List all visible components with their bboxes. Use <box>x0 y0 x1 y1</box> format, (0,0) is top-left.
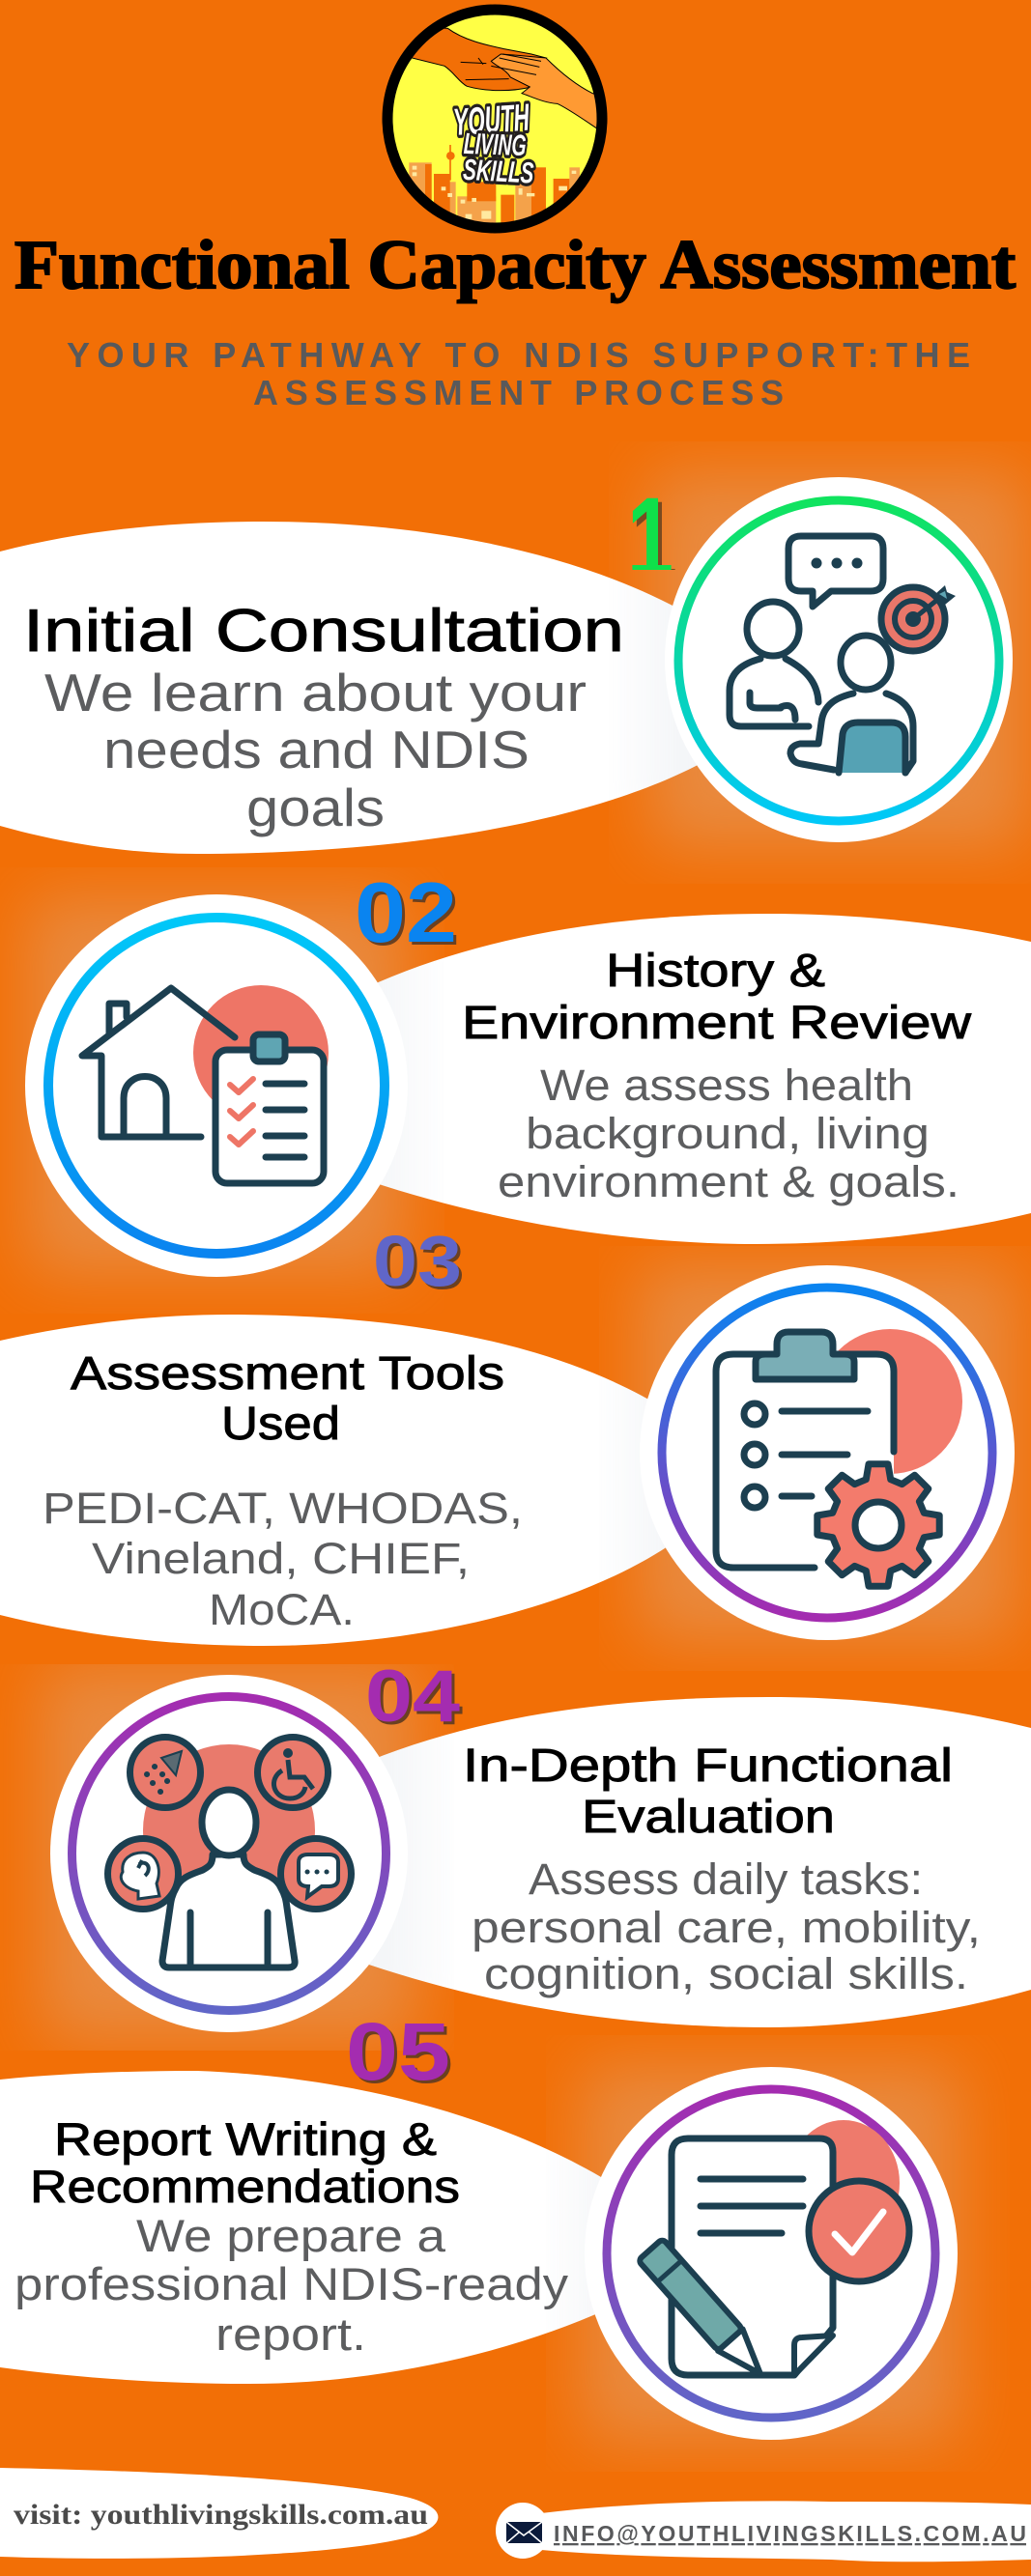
description: environment & goals. <box>498 1157 959 1206</box>
logo: YOUTH <box>452 97 531 144</box>
subtitle: YOUR PATHWAY TO NDIS SUPPORT:THE <box>67 335 970 375</box>
icon: report and pencil <box>585 2067 958 2440</box>
heading <box>71 1348 504 1450</box>
heading <box>463 1741 953 1843</box>
icon: clipboard and gear <box>640 1265 1015 1640</box>
footer: website link <box>0 2468 438 2559</box>
icon: envelope <box>506 2522 542 2543</box>
logo: SKILLS <box>462 154 535 190</box>
description: professional NDIS-ready <box>14 2258 569 2309</box>
panel: step 4 functional evaluation <box>41 1656 1031 2042</box>
footer: website link: visit: youthlivingskills.com.au <box>14 2499 428 2531</box>
logo: LIVING <box>463 127 527 162</box>
banner <box>358 1697 1031 2027</box>
description: cognition, social skills. <box>484 1949 968 1998</box>
number 1: 1 <box>627 474 673 602</box>
banner <box>0 2071 618 2384</box>
description: background, living <box>526 1109 930 1158</box>
number 03: 03 <box>376 1224 465 1304</box>
number 1 <box>632 498 675 570</box>
description <box>498 1061 959 1206</box>
description <box>472 1854 981 1998</box>
banner <box>0 522 710 854</box>
panel: step 5 report writing <box>0 2006 959 2442</box>
description <box>44 663 587 837</box>
heading: Assessment Tools <box>71 1348 504 1400</box>
logo <box>387 10 602 228</box>
number 02: 02 <box>358 867 460 963</box>
description: We learn about your <box>44 663 587 722</box>
description: Assess daily tasks: <box>529 1854 923 1904</box>
number 05: 05 <box>346 2006 450 2097</box>
heading: Used <box>221 1399 340 1450</box>
panel: step 3 assessment tools <box>0 1221 1016 1646</box>
number 02: 02 <box>355 864 457 960</box>
number 05: 05 <box>349 2009 453 2100</box>
description: report. <box>215 2308 366 2360</box>
description: PEDI-CAT, WHODAS, <box>43 1484 523 1533</box>
description: goals <box>246 778 385 837</box>
subtitle: ASSESSMENT PROCESS <box>253 373 784 412</box>
heading: Initial Consultation <box>23 598 624 665</box>
heading: Evaluation <box>582 1792 835 1843</box>
heading <box>30 2113 460 2212</box>
banner <box>367 914 1031 1244</box>
number 1: 1 <box>631 478 677 606</box>
heading: In-Depth Functional <box>463 1741 953 1792</box>
icon: person and daily tasks <box>50 1675 408 2032</box>
panel: step 2 history and environment <box>25 864 1031 1277</box>
banner <box>0 1315 676 1646</box>
description: We prepare a <box>136 2210 446 2261</box>
description: MoCA. <box>209 1585 355 1634</box>
icon: consultation <box>665 477 1013 842</box>
footer: email link <box>496 2501 1031 2562</box>
description <box>43 1484 523 1634</box>
footer: email link: INFO@YOUTHLIVINGSKILLS.COM.AU <box>554 2521 1026 2546</box>
heading: History & <box>606 946 825 997</box>
heading: Recommendations <box>30 2161 460 2212</box>
number 04: 04 <box>365 1656 460 1738</box>
heading: Report Writing & <box>54 2113 437 2165</box>
description: personal care, mobility, <box>472 1903 981 1952</box>
heading <box>462 946 971 1049</box>
description: We assess health <box>540 1061 913 1110</box>
description: needs and NDIS <box>103 720 530 779</box>
description <box>14 2210 569 2360</box>
number 03: 03 <box>373 1221 462 1301</box>
title: Functional Capacity Assessment <box>14 226 1016 303</box>
heading: Environment Review <box>462 998 971 1049</box>
icon: house and checklist <box>25 894 408 1277</box>
subtitle <box>67 335 970 412</box>
number 04: 04 <box>368 1658 463 1741</box>
panel: step 1 initial consultation <box>0 471 1027 854</box>
description: Vineland, CHIEF, <box>92 1534 470 1583</box>
